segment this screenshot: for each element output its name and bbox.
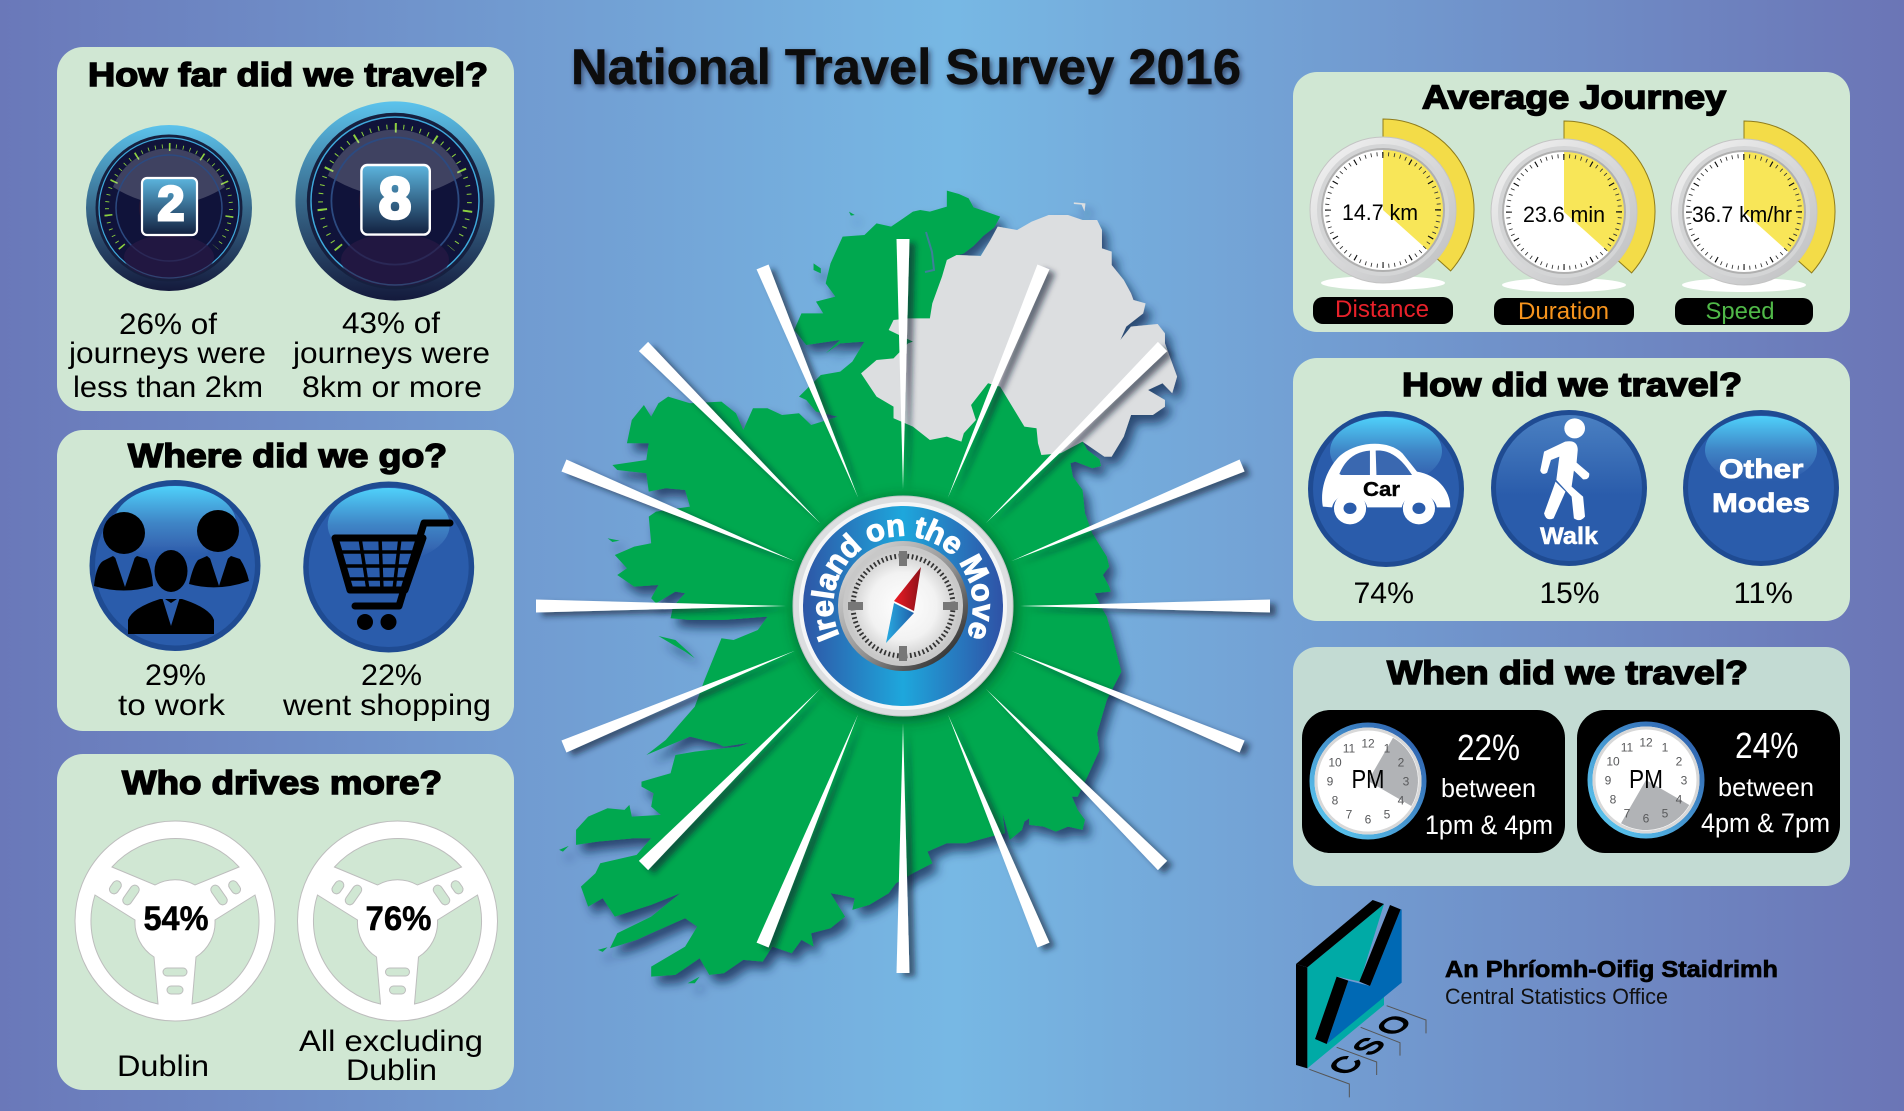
map: republic of Ireland in green [559, 191, 1121, 983]
heading: When did we travel? [1387, 654, 1748, 691]
gauge: 8 km [295, 101, 495, 301]
clock: 1pm to 4pm shaded: 2 [1398, 756, 1405, 770]
caption: over 8km: 8km or more [302, 371, 482, 404]
CSO logo: O [1367, 1011, 1420, 1039]
clock: 4pm to 7pm shaded: 10 [1606, 754, 1620, 768]
panel: who drives more [57, 754, 514, 1090]
label: distance: Distance [1335, 296, 1429, 323]
clock: 1pm to 4pm shaded: PM [1352, 764, 1384, 794]
clock: 4pm to 7pm shaded: 7 [1624, 806, 1631, 820]
gauge: 8 km: 8 [379, 167, 411, 231]
clock: 1pm to 4pm shaded: 7 [1346, 808, 1353, 822]
text: 22% between 1pm and 4pm [1425, 727, 1553, 840]
clock: 1pm to 4pm shaded: 3 [1403, 774, 1410, 788]
CSO logo: C [1320, 1051, 1371, 1078]
text: 24% between 4pm and 7pm [1701, 725, 1830, 838]
heading: Average Journey [1422, 78, 1727, 116]
clock: 1pm to 4pm shaded: 10 [1328, 756, 1342, 770]
steering wheel: all excluding Dublin [298, 821, 498, 1021]
label: speed: Speed [1706, 298, 1774, 325]
compass needle [886, 567, 921, 643]
caption: over 8km: 43% of [342, 307, 441, 340]
dial value: 14.7 km: 14.7 km [1342, 200, 1418, 225]
clock: 4pm to 7pm shaded: 6 [1643, 812, 1650, 826]
caption: shopping: went shopping [282, 689, 491, 722]
heading: Where did we go? [128, 437, 447, 474]
clock: 4pm to 7pm shaded: 8 [1610, 792, 1617, 806]
caption: all excluding Dublin: All excluding [299, 1025, 483, 1058]
gauge: 2 km [86, 125, 252, 291]
clock: 1pm to 4pm shaded: 5 [1384, 808, 1391, 822]
CSO logo [1296, 900, 1426, 1097]
panel: how did we travel [1293, 358, 1850, 621]
map of Ireland with rays and compass [496, 190, 1306, 996]
icon: walk button [1491, 410, 1647, 566]
title: National Travel Survey 2016 [571, 39, 1241, 95]
icon: other modes button: Modes [1712, 488, 1810, 518]
dial: distance [1310, 119, 1474, 290]
dial: duration [1491, 121, 1655, 292]
clock: 1pm to 4pm shaded: 4 [1398, 794, 1405, 808]
clock: 4pm to 7pm shaded: 9 [1605, 774, 1612, 788]
steering wheel: all excluding Dublin: 76% [366, 900, 432, 938]
icon: car button [1308, 411, 1464, 567]
caption: all excluding Dublin: Dublin [346, 1054, 437, 1087]
clock: 1pm to 4pm shaded: 11 [1343, 742, 1356, 756]
compass badge [786, 490, 1026, 730]
caption: to work: to work [118, 689, 226, 722]
panel: how far did we travel [57, 47, 514, 411]
CSO name in Irish: An Phríomh-Oifig Staidrimh [1445, 956, 1778, 982]
caption: to work [118, 659, 226, 722]
caption: over 8km: journeys were [292, 337, 490, 370]
caption: shopping [282, 659, 491, 722]
clock: 1pm to 4pm shaded: 6 [1365, 812, 1372, 826]
heading: Who drives more? [122, 764, 442, 801]
icon: shopping cart [303, 482, 474, 652]
clock: 4pm to 7pm shaded: 11 [1621, 740, 1634, 754]
icon: car button: Car [1363, 479, 1400, 501]
caption: under 2km: 26% of [119, 308, 218, 341]
panel: where did we go [57, 430, 514, 731]
caption: under 2km: less than 2km [73, 371, 263, 404]
icon: walk button: Walk [1540, 523, 1599, 550]
clock: 4pm to 7pm shaded: 12 [1639, 736, 1653, 750]
label: speed [1675, 298, 1813, 325]
clock: 1pm to 4pm shaded: 12 [1361, 736, 1375, 750]
card: 1pm to 4pm [1302, 710, 1565, 853]
clock: 4pm to 7pm shaded [1590, 724, 1702, 836]
steering wheel: Dublin [75, 821, 275, 1021]
panel: when did we travel [1293, 647, 1850, 886]
caption: all excluding Dublin [299, 1025, 483, 1087]
heading: How did we travel? [1402, 366, 1742, 403]
icon: other modes button: Other [1719, 454, 1804, 484]
clock: 4pm to 7pm shaded: PM [1629, 764, 1663, 794]
value: walk 15%: 15% [1540, 577, 1600, 610]
clock: 1pm to 4pm shaded: 1 [1384, 742, 1391, 756]
clock: 4pm to 7pm shaded: 3 [1681, 774, 1688, 788]
caption: under 2km: journeys were [68, 337, 266, 370]
badge text: Ireland on the Move [810, 517, 990, 642]
text: 24% between 4pm and 7pm: between [1718, 772, 1814, 802]
lough inlet [925, 232, 934, 272]
CSO name in English: Central Statistics Office [1445, 984, 1668, 1009]
caption: over 8km [292, 307, 490, 404]
map: Northern Ireland in grey [861, 202, 1177, 457]
clock: 1pm to 4pm shaded [1312, 725, 1424, 837]
caption: Dublin: Dublin [117, 1050, 209, 1083]
icon: people at work [90, 480, 260, 651]
label: duration [1494, 298, 1634, 325]
clock: 4pm to 7pm shaded: 5 [1662, 806, 1669, 820]
card: 4pm to 7pm [1577, 710, 1840, 853]
dial value: 23.6 min: 23.6 min [1523, 202, 1605, 227]
heading: How far did we travel? [88, 56, 488, 93]
text: 24% between 4pm and 7pm: 4pm & 7pm [1701, 808, 1830, 838]
text: 22% between 1pm and 4pm: 22% [1457, 727, 1520, 768]
dial value: 36.7 km/hr: 36.7 km/hr [1692, 202, 1792, 227]
icon: other modes button [1683, 410, 1839, 566]
clock: 1pm to 4pm shaded: 9 [1327, 774, 1334, 788]
steering wheel: Dublin: 54% [144, 900, 208, 938]
text: 22% between 1pm and 4pm: between [1441, 773, 1536, 803]
caption: shopping: 22% [361, 659, 422, 692]
caption: under 2km [68, 308, 266, 404]
caption: to work: 29% [145, 659, 206, 692]
clock: 4pm to 7pm shaded: 2 [1676, 754, 1683, 768]
text: 24% between 4pm and 7pm: 24% [1735, 725, 1798, 766]
panel: average journey [1293, 72, 1850, 332]
gauge: 2 km: 2 [158, 178, 184, 231]
clock: 1pm to 4pm shaded: 8 [1332, 794, 1339, 808]
clock: 4pm to 7pm shaded: 1 [1662, 740, 1669, 754]
label: distance [1313, 296, 1453, 324]
clock: 4pm to 7pm shaded: 4 [1676, 792, 1683, 806]
text: 22% between 1pm and 4pm: 1pm & 4pm [1425, 810, 1553, 840]
value: car 74%: 74% [1354, 577, 1414, 610]
label: duration: Duration [1518, 298, 1609, 325]
CSO logo: S [1344, 1033, 1393, 1059]
sixteen radiating rays [536, 239, 1270, 973]
map: island outline [559, 191, 1177, 983]
value: other 11%: 11% [1734, 577, 1793, 610]
dial: speed [1671, 121, 1835, 292]
